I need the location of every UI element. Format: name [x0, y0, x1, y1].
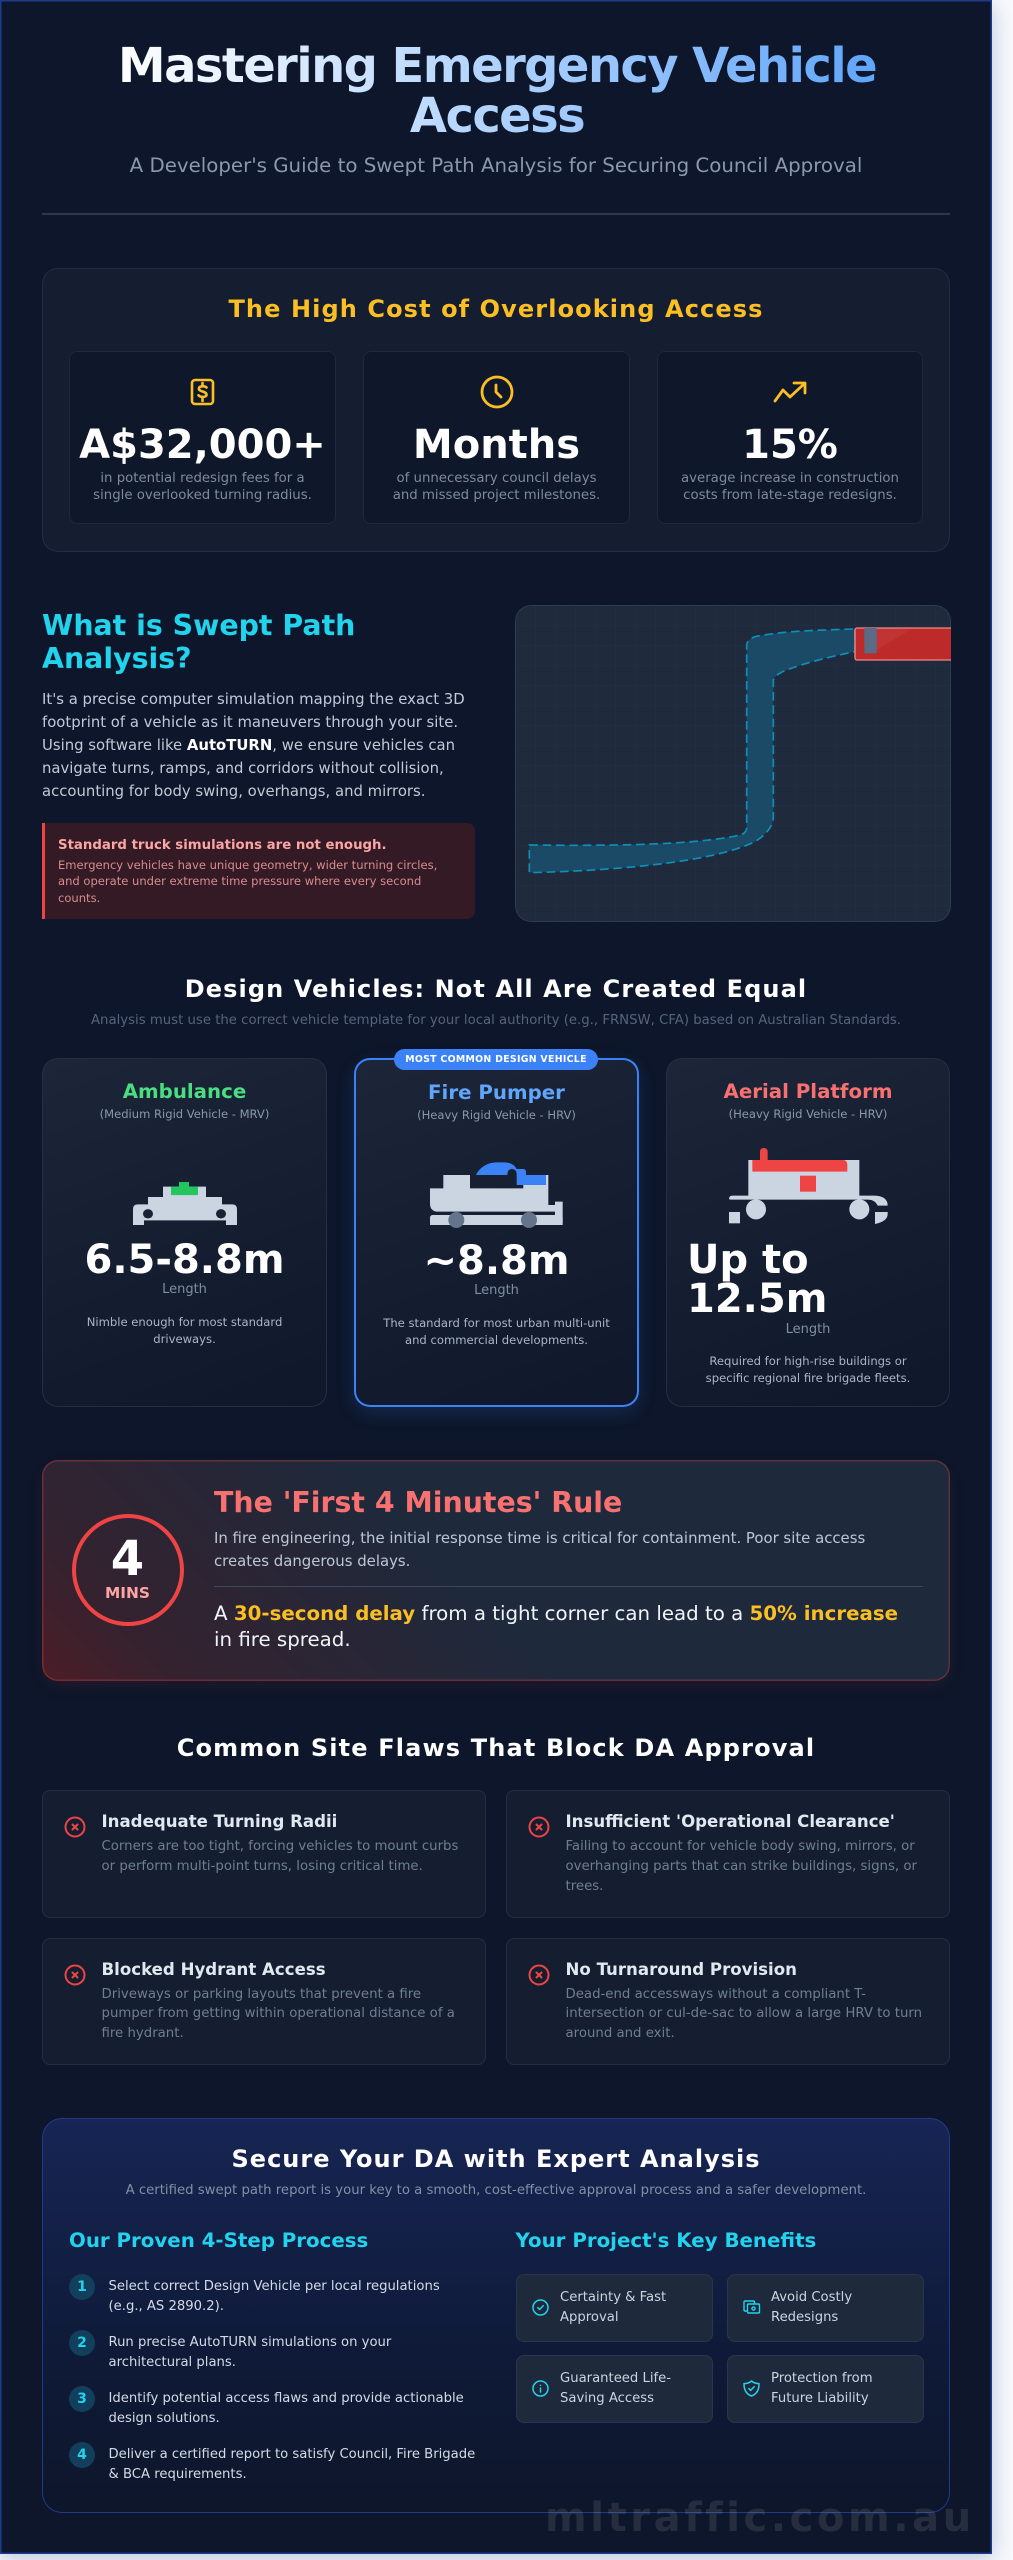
rule highlight text [214, 1602, 898, 1651]
mins label: MINS [105, 1584, 150, 1602]
stat description [393, 471, 600, 503]
flaw description: intersection or cul-de-sac to allow a large HRV to turn [566, 2006, 922, 2021]
section heading: common site flaws: Common Site Flaws That Block DA Approval [177, 1734, 815, 1762]
flaw description: around and exit. [566, 2026, 675, 2041]
step 2 [69, 2330, 392, 2370]
vehicle card: fire pumper (most common) [354, 1058, 639, 1407]
step number [69, 2386, 95, 2412]
rule divider [214, 1586, 923, 1587]
stat description: single overlooked turning radius. [93, 488, 312, 503]
icon: clock [480, 376, 514, 408]
step text [108, 2447, 475, 2482]
vehicle name: Aerial Platform [724, 1080, 892, 1103]
icon: dollar note [190, 378, 214, 406]
stat value: A$32,000+ [79, 422, 326, 468]
step number [69, 2274, 95, 2300]
step text: Select correct Design Vehicle per local regulations [108, 2279, 440, 2294]
flaw description: overhanging parts that can strike buildings, signs, or [566, 1859, 917, 1874]
vehicle description: and commercial developments. [405, 1333, 588, 1347]
flaw title: Insufficient 'Operational Clearance' [566, 1812, 895, 1831]
step number: 4 [77, 2447, 87, 2463]
benefit text: Saving Access [560, 2390, 654, 2406]
benefit text: Protection from [771, 2370, 873, 2386]
stat description: average increase in construction [681, 471, 899, 486]
length value: Up to [687, 1236, 809, 1282]
step number: 2 [77, 2335, 87, 2351]
stat value: Months [413, 422, 580, 468]
title: Access [410, 88, 584, 144]
step text: & BCA requirements. [108, 2467, 247, 2482]
rule heading: The 'First 4 Minutes' Rule [214, 1486, 622, 1519]
icon: aerial platform [729, 1148, 888, 1224]
vehicle description: driveways. [153, 1332, 216, 1346]
rule text: creates dangerous delays. [214, 1552, 410, 1570]
rule highlight text: A 30-second delay from a tight corner can lead to a 50% increase [214, 1602, 898, 1625]
icon: cross circle [64, 1816, 86, 1838]
step text: Run precise AutoTURN simulations on your [108, 2335, 391, 2350]
step number: 1 [77, 2279, 87, 2295]
length value: ~8.8m [423, 1238, 570, 1284]
flaw description: Corners are too tight, forcing vehicles to mount curbs [102, 1839, 458, 1854]
vehicle description [706, 1354, 910, 1385]
step number: 3 [77, 2391, 87, 2407]
benefit text [771, 2368, 873, 2408]
step number [69, 2442, 95, 2468]
section heading: Analysis? [42, 642, 192, 674]
body paragraph [42, 690, 465, 800]
vehicle description: specific regional fire brigade fleets. [706, 1371, 910, 1385]
length value: 12.5m [687, 1276, 827, 1322]
stat card: construction cost increase [657, 351, 923, 524]
flaw description: fire hydrant. [102, 2026, 184, 2041]
flaw card: no turnaround provision [506, 1938, 950, 2065]
icon: cross circle [64, 1964, 86, 1986]
icon: cross circle [528, 1816, 550, 1838]
title: Mastering Emergency Vehicle [118, 38, 876, 94]
fire truck [855, 628, 962, 660]
swept path envelope [529, 629, 855, 873]
body paragraph: It's a precise computer simulation mapping the exact 3D [42, 690, 465, 708]
benefit text: Redesigns [771, 2310, 838, 2324]
flaw description [102, 1986, 455, 2041]
icon: cross circle [528, 1964, 550, 1986]
benefit text: Certainty & Fast [560, 2290, 666, 2304]
benefit: guaranteed life-saving access [516, 2355, 713, 2423]
vehicle card: aerial platform [666, 1058, 950, 1407]
swept path diagram drawing [528, 627, 951, 874]
stat description [681, 471, 899, 503]
benefit text: Avoid Costly [771, 2290, 852, 2304]
callout text: counts. [58, 891, 100, 905]
flaw description: Driveways or parking layouts that prevent a fire [102, 1986, 421, 2002]
vehicle description: The standard for most urban multi-unit [383, 1316, 610, 1330]
step 1 [69, 2274, 440, 2314]
flaw title: Inadequate Turning Radii [102, 1812, 337, 1831]
flaw description: Failing to account for vehicle body swing, mirrors, or [566, 1839, 915, 1854]
stat description: in potential redesign fees for a [100, 471, 305, 486]
step text: (e.g., AS 2890.2). [108, 2299, 224, 2314]
badge: most common design vehicle [394, 1049, 598, 1070]
icon: trending up [774, 382, 806, 402]
benefit text: Approval [560, 2310, 619, 2324]
callout title: Standard truck simulations are not enough. [58, 838, 387, 853]
countdown badge: 4 mins [72, 1514, 184, 1626]
stat card: council delays [363, 351, 630, 524]
step text [108, 2279, 440, 2314]
benefit text: Guaranteed Life- [560, 2370, 671, 2386]
length label: Length [162, 1282, 207, 1297]
flaw description [566, 1839, 917, 1894]
swept path diagram [515, 605, 951, 922]
vehicle description [383, 1316, 610, 1347]
flaw card: insufficient operational clearance [506, 1790, 950, 1918]
body paragraph: Using software like AutoTURN, we ensure vehicles can [42, 736, 455, 754]
callout text: Emergency vehicles have unique geometry, wider turning circles, [58, 858, 437, 872]
icon: info circle [532, 2380, 549, 2397]
panel heading: Secure Your DA with Expert Analysis [232, 2145, 760, 2173]
vehicle description: Nimble enough for most standard [87, 1315, 282, 1329]
icon: banknotes [743, 2299, 760, 2316]
section heading [42, 608, 355, 674]
vehicle name: Ambulance [123, 1080, 246, 1103]
stat description [93, 471, 312, 503]
length value: 6.5-8.8m [84, 1237, 284, 1283]
length label: Length [474, 1283, 519, 1298]
flaw card: inadequate turning radii [42, 1790, 486, 1918]
stat description: and missed project milestones. [393, 488, 600, 503]
vehicle name: Fire Pumper [428, 1081, 565, 1104]
flaw description: Dead-end accessways without a compliant T- [566, 1986, 866, 2002]
subtitle: A Developer's Guide to Swept Path Analysis for Securing Council Approval [130, 154, 862, 177]
flaw description [102, 1839, 458, 1874]
section: design vehicles heading [91, 975, 901, 1028]
length value [687, 1236, 827, 1322]
vehicle class: (Heavy Rigid Vehicle - HRV) [417, 1108, 576, 1122]
step text [108, 2391, 464, 2426]
benefit: avoid costly redesigns [727, 2274, 924, 2342]
benefit text [771, 2288, 852, 2328]
benefit: certainty and fast approval [516, 2274, 713, 2342]
section: what is swept path analysis [42, 608, 475, 919]
benefit text [560, 2290, 666, 2324]
panel heading: The High Cost of Overlooking Access [228, 295, 764, 323]
vehicle class: (Medium Rigid Vehicle - MRV) [100, 1107, 269, 1121]
body paragraph: footprint of a vehicle as it maneuvers through your site. [42, 712, 458, 730]
panel subtitle: A certified swept path report is your key to a smooth, cost-effective approval process and a safer development. [126, 2183, 866, 2198]
rule highlight text: in fire spread. [214, 1628, 351, 1651]
step text: Identify potential access flaws and provide actionable [108, 2391, 464, 2406]
step 4 [69, 2442, 475, 2482]
stat card: redesign fees [69, 351, 336, 524]
flaw title: Blocked Hydrant Access [102, 1960, 326, 1978]
icon: check circle [532, 2299, 549, 2316]
benefit text [560, 2368, 671, 2408]
vehicle card: ambulance [42, 1058, 327, 1407]
callout text: and operate under extreme time pressure where every second [58, 874, 421, 888]
badge: most common design vehicle: MOST COMMON DESIGN VEHICLE [405, 1054, 587, 1065]
step text [108, 2335, 392, 2370]
watermark: mltraffic.com.au [545, 2495, 975, 2541]
callout text [58, 858, 437, 905]
body paragraph: accounting for body swing, overhangs, and mirrors. [42, 782, 425, 800]
panel: high cost of overlooking access [42, 268, 950, 552]
rule text: In fire engineering, the initial response time is critical for containment. Poor site access [214, 1528, 865, 1546]
step text: architectural plans. [108, 2355, 236, 2370]
vehicle class: (Heavy Rigid Vehicle - HRV) [729, 1107, 887, 1121]
step number [69, 2330, 95, 2356]
stat description: costs from late-stage redesigns. [683, 488, 897, 503]
icon: shield check [743, 2380, 760, 2397]
benefit text: Future Liability [771, 2390, 869, 2406]
section heading: Design Vehicles: Not All Are Created Equal [185, 975, 807, 1003]
flaw title: No Turnaround Provision [566, 1960, 797, 1978]
flaw description [566, 1986, 922, 2041]
rule text [214, 1528, 865, 1570]
header divider [42, 213, 950, 214]
flaw description: trees. [566, 1879, 603, 1894]
icon: ambulance [133, 1182, 237, 1225]
step text: Deliver a certified report to satisfy Council, Fire Brigade [108, 2447, 475, 2462]
flaw description: pumper from getting within operational distance of a [102, 2006, 455, 2021]
section subtitle: Analysis must use the correct vehicle template for your local authority (e.g., FRNSW, CFA) based on Australian Standards. [91, 1013, 901, 1028]
number 4: 4 [111, 1531, 144, 1587]
header [42, 38, 950, 215]
flaw card: blocked hydrant access [42, 1938, 486, 2065]
step text: design solutions. [108, 2411, 220, 2426]
length label: Length [786, 1322, 830, 1336]
icon: fire pumper [430, 1162, 563, 1228]
flaw description: or perform multi-point turns, losing critical time. [102, 1859, 423, 1874]
body paragraph: navigate turns, ramps, and corridors without collision, [42, 758, 444, 776]
benefits heading: Your Project's Key Benefits [516, 2229, 816, 2252]
vehicle description [87, 1315, 282, 1346]
benefit: protection from future liability [727, 2355, 924, 2423]
title [116, 41, 878, 141]
callout: standard truck simulations [42, 823, 475, 919]
step 3 [69, 2386, 464, 2426]
section heading: What is Swept Path [42, 608, 355, 642]
stat value: 15% [742, 422, 838, 468]
process heading: Our Proven 4-Step Process [69, 2229, 368, 2252]
panel: secure your DA [42, 2118, 950, 2513]
vehicle description: Required for high-rise buildings or [709, 1354, 907, 1368]
panel: first 4 minutes rule [42, 1460, 950, 1681]
stat description: of unnecessary council delays [396, 471, 597, 486]
